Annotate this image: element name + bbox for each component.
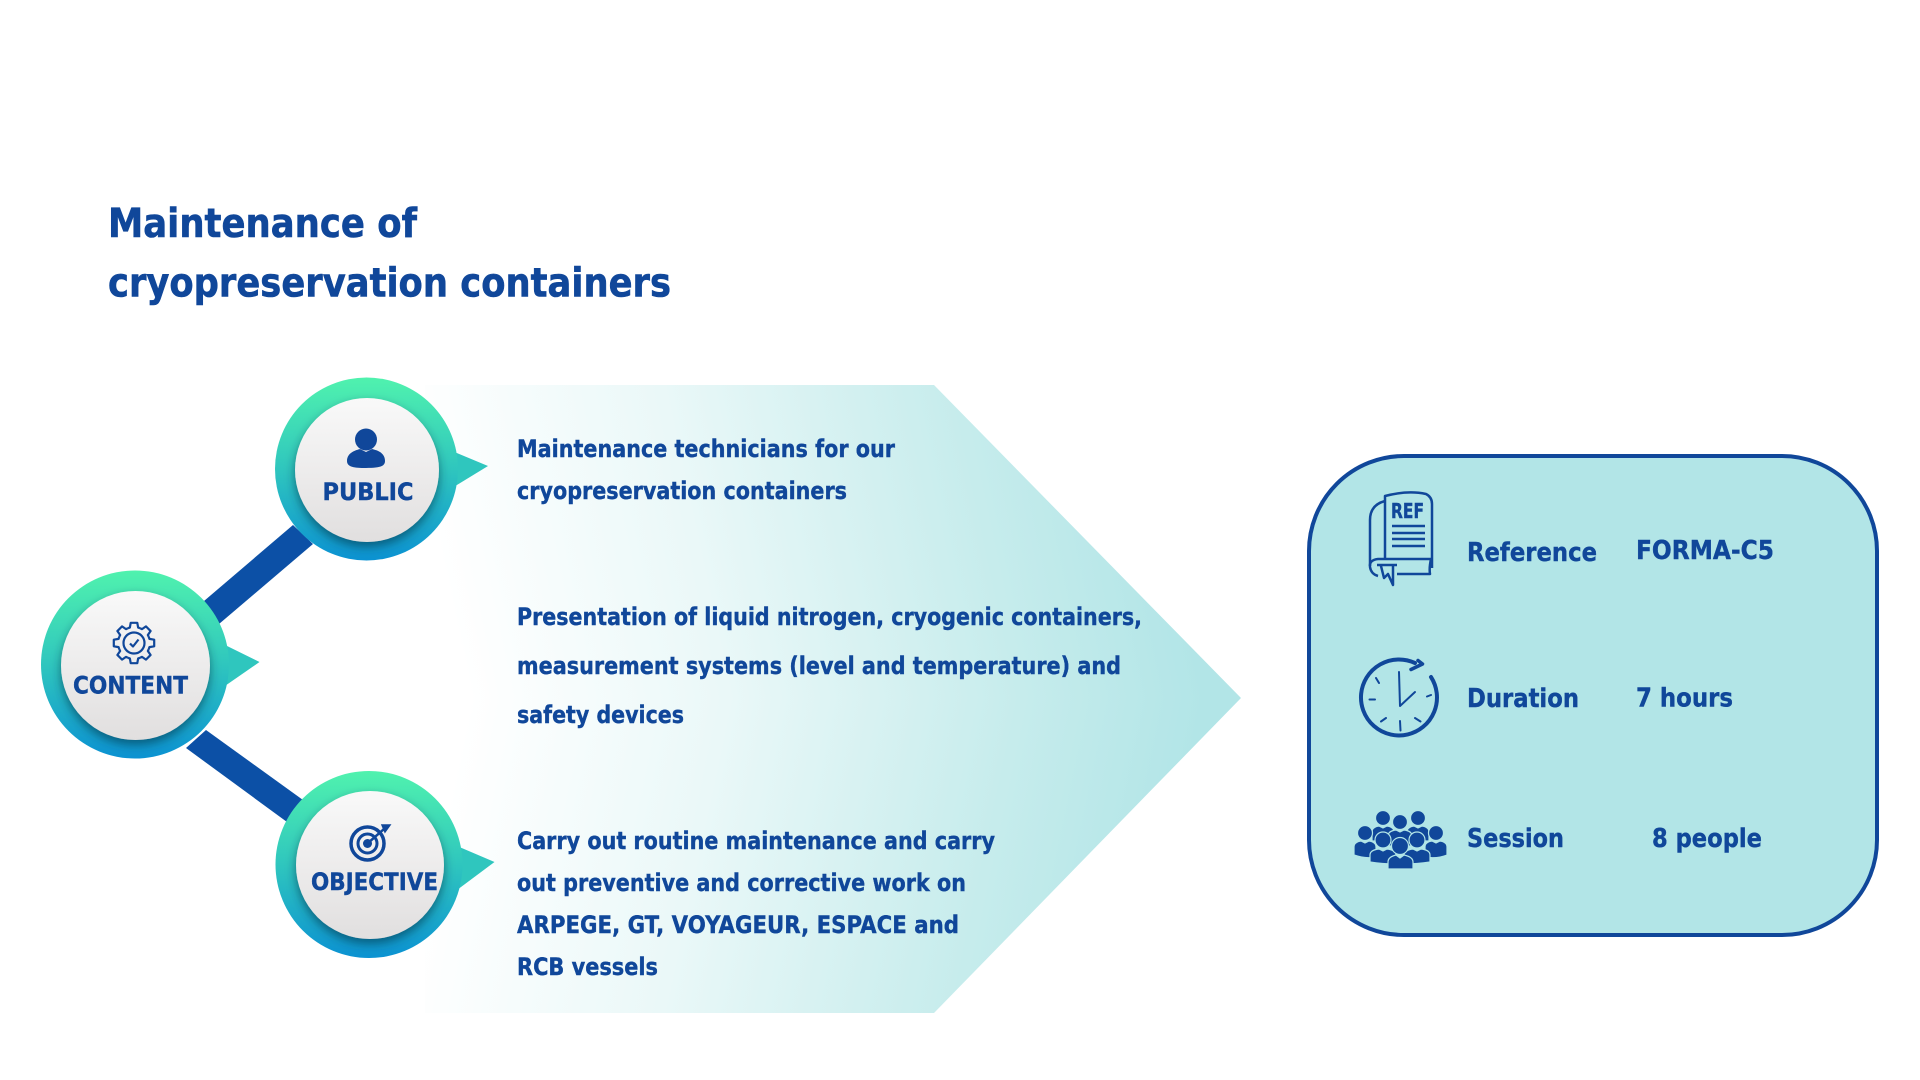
title: cryopreservation containers xyxy=(108,260,671,306)
label: CONTENT xyxy=(73,672,189,700)
pointer tail xyxy=(457,846,494,890)
text block: public xyxy=(517,435,895,505)
label: reference: Reference xyxy=(1467,538,1597,568)
inner disc xyxy=(61,591,210,740)
icon: target xyxy=(351,825,390,860)
inner disc xyxy=(296,791,444,939)
node: content xyxy=(41,570,260,758)
icon: group of people xyxy=(1354,810,1447,869)
pointer tail xyxy=(222,644,260,688)
arrow panel: gradient background xyxy=(425,385,1241,1013)
pointer tail xyxy=(452,451,488,488)
text block: objective: Carry out routine maintenance and carry xyxy=(517,827,995,855)
icon: reference book: REF xyxy=(1391,499,1424,523)
title xyxy=(108,201,671,306)
panel background xyxy=(1309,456,1877,935)
connector: content to objective xyxy=(186,730,303,822)
panel: course details xyxy=(1309,456,1877,935)
icon: gear xyxy=(114,623,154,663)
text block: public: cryopreservation containers xyxy=(517,477,847,505)
text block: objective xyxy=(517,827,995,981)
node: public xyxy=(275,378,488,560)
text block: objective: out preventive and corrective work on xyxy=(517,869,966,897)
inner disc xyxy=(295,398,439,542)
icon: clock xyxy=(1361,659,1437,735)
outer ring xyxy=(275,378,458,560)
outer ring xyxy=(276,771,462,958)
connector: content to public xyxy=(204,525,313,624)
value: session: 8 people xyxy=(1652,824,1762,854)
text block: objective: RCB vessels xyxy=(517,953,658,981)
label: OBJECTIVE xyxy=(311,868,438,896)
text block: objective: ARPEGE, GT, VOYAGEUR, ESPACE and xyxy=(517,911,959,939)
text block: public: Maintenance technicians for our xyxy=(517,435,895,463)
text block: content: Presentation of liquid nitrogen, cryogenic containers, xyxy=(517,603,1142,631)
value: reference: FORMA-C5 xyxy=(1636,536,1774,566)
text block: content: safety devices xyxy=(517,701,684,729)
value: duration: 7 hours xyxy=(1636,684,1733,714)
label: duration: Duration xyxy=(1467,684,1579,714)
outer ring xyxy=(41,570,229,758)
node: objective xyxy=(276,771,494,958)
text block: content: measurement systems (level and temperature) and xyxy=(517,652,1121,680)
text block: content xyxy=(517,603,1142,729)
title: Maintenance of xyxy=(108,201,418,247)
label: session: Session xyxy=(1467,824,1564,854)
label: PUBLIC xyxy=(322,478,414,506)
icon: person xyxy=(347,428,385,468)
icon: reference book xyxy=(1370,492,1432,585)
